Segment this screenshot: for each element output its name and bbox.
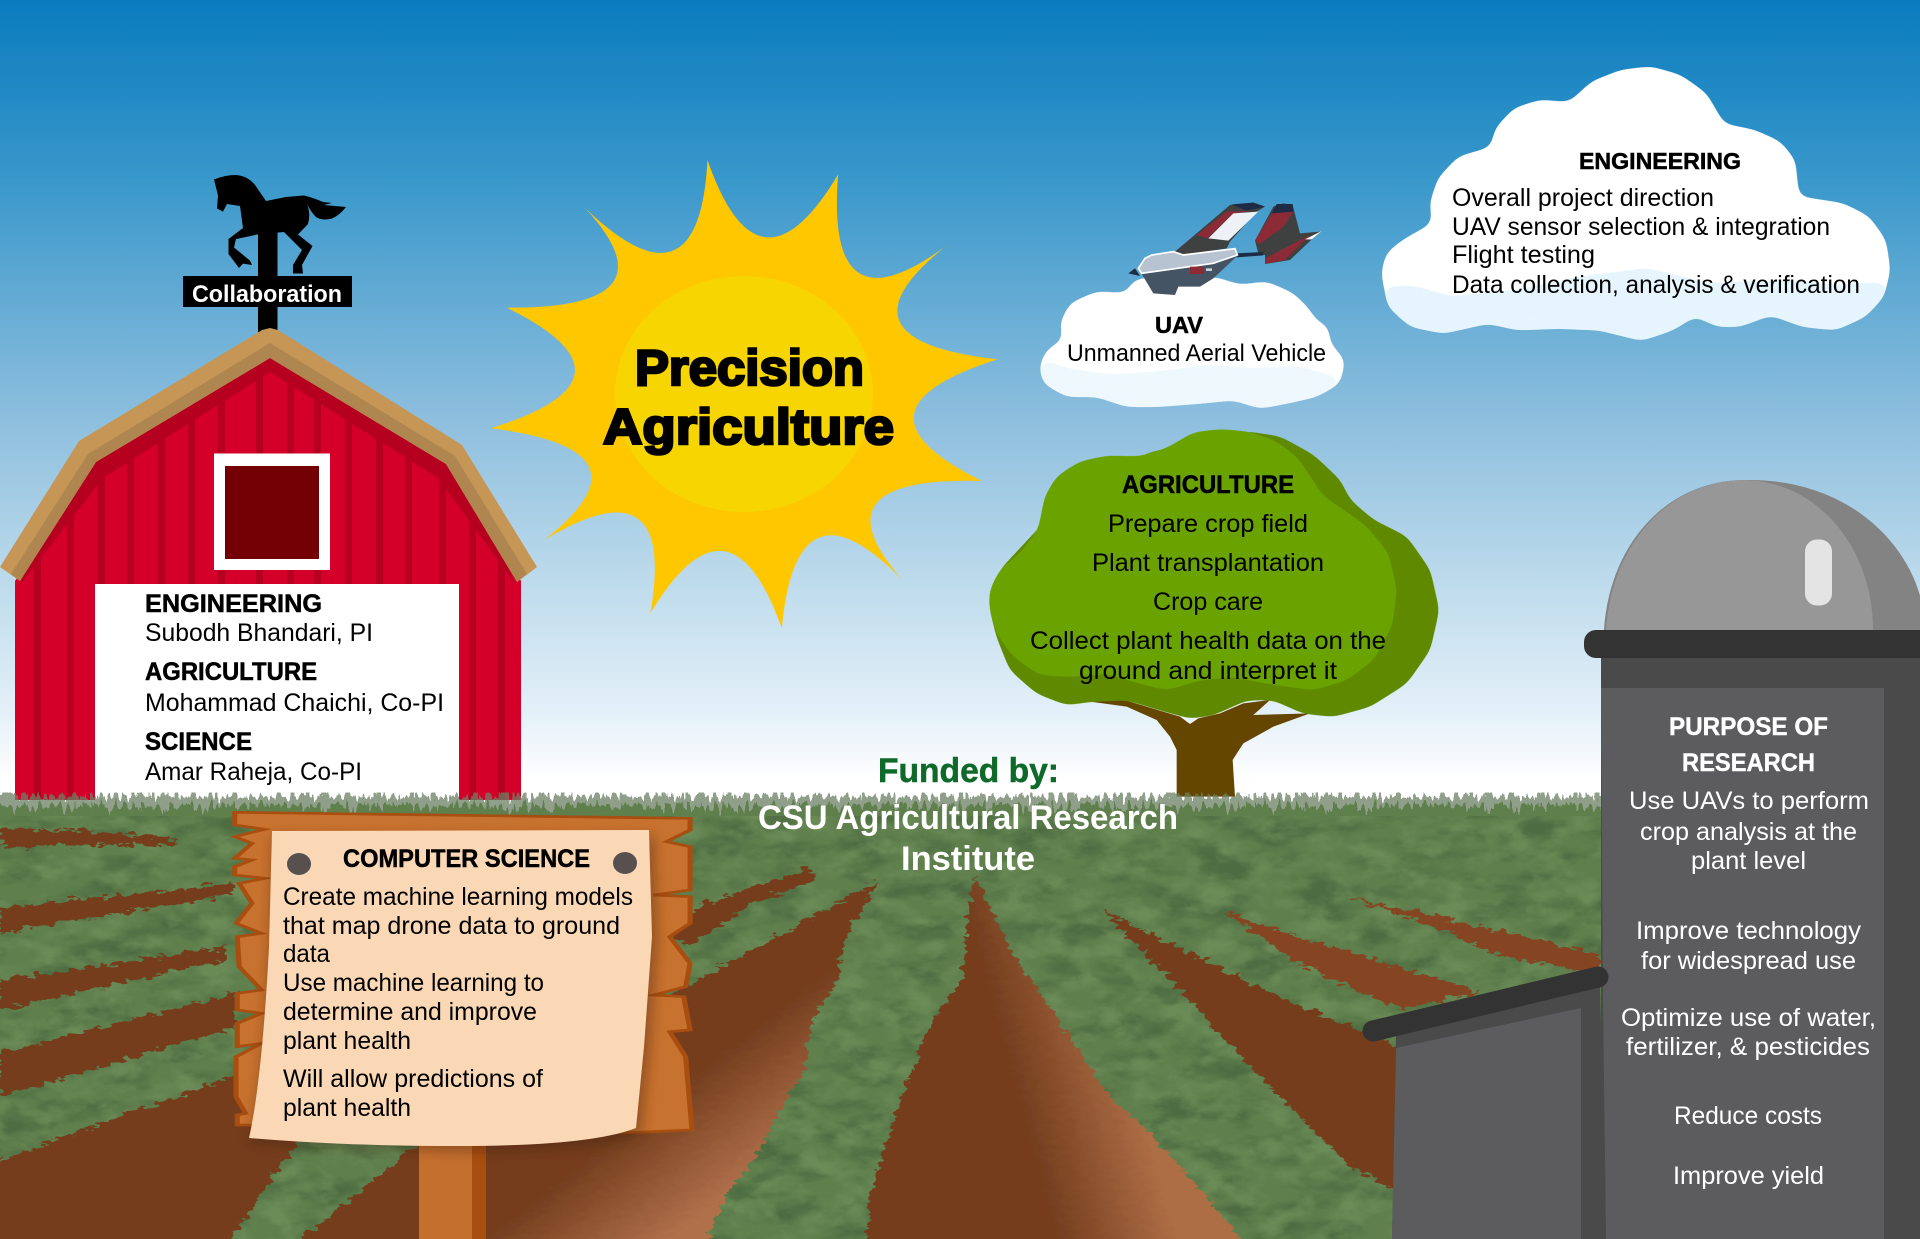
- silo roof band: [1584, 630, 1920, 658]
- grass highlights: [0, 816, 1601, 1239]
- silo body: [1601, 655, 1920, 1239]
- funding text: CSU Agricultural Research: [758, 799, 1178, 837]
- purpose of research text: Improve technology: [1636, 917, 1862, 945]
- purpose of research text: RESEARCH: [1682, 749, 1815, 777]
- computer science text: plant health: [283, 1094, 411, 1122]
- barn: [0, 328, 540, 800]
- engineering text: Data collection, analysis & verification: [1452, 271, 1860, 299]
- barn wall: [15, 358, 521, 800]
- UAV cloud: [1040, 202, 1344, 408]
- agriculture text: Crop care: [1153, 588, 1263, 616]
- dome: [1606, 480, 1873, 630]
- canopy: [989, 429, 1439, 718]
- title: Agriculture: [603, 399, 894, 455]
- agriculture text: [1030, 471, 1386, 685]
- team panel: Amar Raheja, Co-PI: [145, 758, 362, 786]
- paper note: [249, 830, 652, 1146]
- collaboration sign: Collaboration: [192, 281, 342, 308]
- silo panel: [1601, 688, 1884, 1239]
- computer science text: Use machine learning to: [283, 969, 544, 997]
- funding text: Institute: [901, 840, 1035, 878]
- engineering text: UAV sensor selection & integration: [1452, 213, 1830, 241]
- purpose of research text: for widespread use: [1641, 947, 1856, 975]
- barn planks: [20, 358, 516, 800]
- computer science text: data: [283, 940, 330, 968]
- purpose of research text: Use UAVs to perform: [1629, 787, 1869, 815]
- purpose of research text: Reduce costs: [1674, 1102, 1822, 1130]
- team panel: SCIENCE: [145, 728, 252, 756]
- team panel: ENGINEERING: [145, 590, 322, 618]
- computer science text: Will allow predictions of: [283, 1065, 543, 1093]
- engineering text: [1452, 148, 1860, 299]
- team panel: AGRICULTURE: [145, 658, 317, 686]
- cloud shape: [1377, 67, 1895, 350]
- team panel: Subodh Bhandari, PI: [145, 619, 373, 647]
- purpose of research text: plant level: [1691, 847, 1806, 875]
- barn roof: [0, 328, 537, 582]
- team panel: Mohammad Chaichi, Co-PI: [145, 689, 444, 717]
- computer science text: COMPUTER SCIENCE: [343, 845, 590, 873]
- dome window: [1805, 540, 1832, 606]
- UAV text: UAV: [1155, 312, 1204, 338]
- engineering text: Flight testing: [1452, 241, 1595, 269]
- sun with title: [491, 160, 998, 628]
- vane post: [258, 225, 278, 335]
- horse weather vane: [183, 175, 352, 335]
- computer science text: that map drone data to ground: [283, 912, 620, 940]
- sun rays: [491, 160, 998, 628]
- horse silhouette: [214, 175, 346, 274]
- pin right: [613, 852, 637, 874]
- purpose of research text: PURPOSE OF: [1669, 713, 1828, 741]
- purpose of research text: Improve yield: [1673, 1162, 1824, 1190]
- engineering text: Overall project direction: [1452, 184, 1714, 212]
- title: [603, 340, 894, 455]
- agriculture text: Prepare crop field: [1108, 510, 1308, 538]
- agriculture text: Collect plant health data on the: [1030, 627, 1386, 655]
- dome shadow: [1604, 480, 1920, 630]
- drone: [1128, 203, 1322, 295]
- computer science text: determine and improve: [283, 998, 537, 1026]
- grass shading: [0, 816, 1601, 1239]
- funding text: [758, 752, 1178, 878]
- purpose of research text: crop analysis at the: [1640, 818, 1857, 846]
- tree: [989, 429, 1439, 797]
- computer science text: Create machine learning models: [283, 883, 633, 911]
- barn roof inner band: [11, 343, 527, 582]
- trunk: [1090, 697, 1310, 797]
- paper shadow: [249, 836, 658, 1152]
- engineering cloud: [1377, 67, 1895, 350]
- pin left: [287, 853, 311, 875]
- engineering text: ENGINEERING: [1579, 148, 1741, 174]
- barn window: [214, 454, 330, 570]
- wood board: [235, 812, 692, 1133]
- UAV text: Unmanned Aerial Vehicle: [1067, 340, 1326, 367]
- agriculture text: ground and interpret it: [1079, 657, 1337, 685]
- purpose of research text: Optimize use of water,: [1621, 1004, 1876, 1032]
- crop field: [0, 792, 1601, 1239]
- computer science text: [283, 845, 633, 1122]
- title: Precision: [635, 340, 864, 396]
- grass base: [0, 798, 1601, 1239]
- computer science sign: [235, 812, 692, 1239]
- agriculture text: AGRICULTURE: [1122, 471, 1294, 499]
- sun core: [615, 276, 873, 512]
- purpose of research text: fertilizer, & pesticides: [1626, 1033, 1870, 1061]
- horizon grass tufts: [0, 792, 1601, 816]
- shed: [1373, 977, 1606, 1239]
- funding text: Funded by:: [878, 752, 1059, 790]
- soil furrows: [0, 828, 1600, 1239]
- computer science text: plant health: [283, 1027, 411, 1055]
- agriculture text: Plant transplantation: [1092, 549, 1324, 577]
- team panel: [95, 584, 459, 800]
- sign post: [419, 1100, 486, 1239]
- UAV text: [1067, 312, 1326, 367]
- silo: [1373, 480, 1920, 1239]
- cloud shape: [1040, 278, 1344, 408]
- purpose of research text: [1621, 713, 1876, 1190]
